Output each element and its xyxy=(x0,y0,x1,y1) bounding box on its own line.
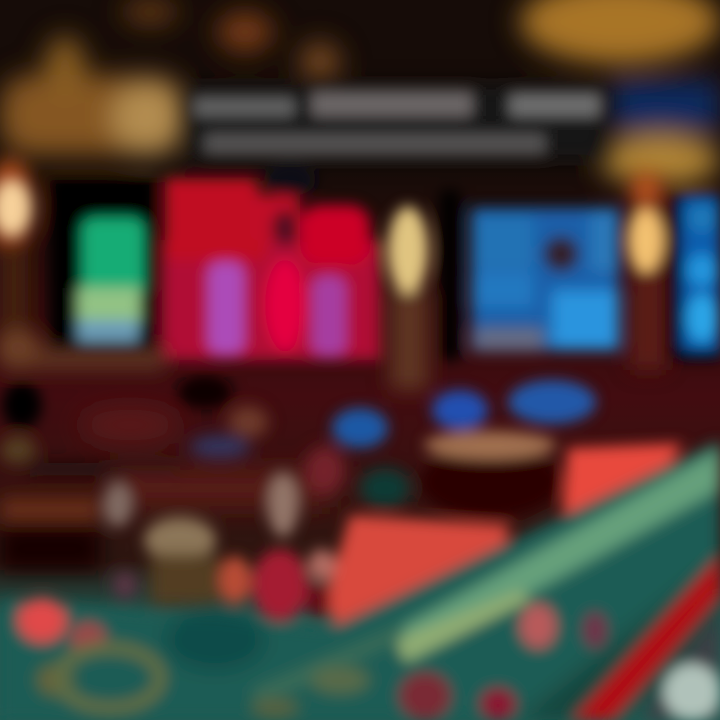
green betting table xyxy=(0,440,720,720)
title: illegible blurred lettering xyxy=(186,84,606,160)
panel: green screen xyxy=(50,176,154,352)
left wall lamp xyxy=(0,159,34,335)
table markings bottom left xyxy=(18,598,160,708)
panel: blue screen xyxy=(472,208,618,350)
blue seats xyxy=(332,380,596,448)
right lamp xyxy=(628,172,666,370)
centre table xyxy=(359,431,560,518)
red chips on table xyxy=(399,604,607,720)
centre lamp xyxy=(388,190,460,390)
counter and seating xyxy=(0,329,330,570)
figures and chips xyxy=(104,446,345,621)
ceiling lights xyxy=(0,0,720,186)
red rail xyxy=(572,555,720,720)
panel: right blue screen xyxy=(668,190,720,360)
panel: red screen xyxy=(162,164,380,360)
red felt areas xyxy=(325,443,682,625)
